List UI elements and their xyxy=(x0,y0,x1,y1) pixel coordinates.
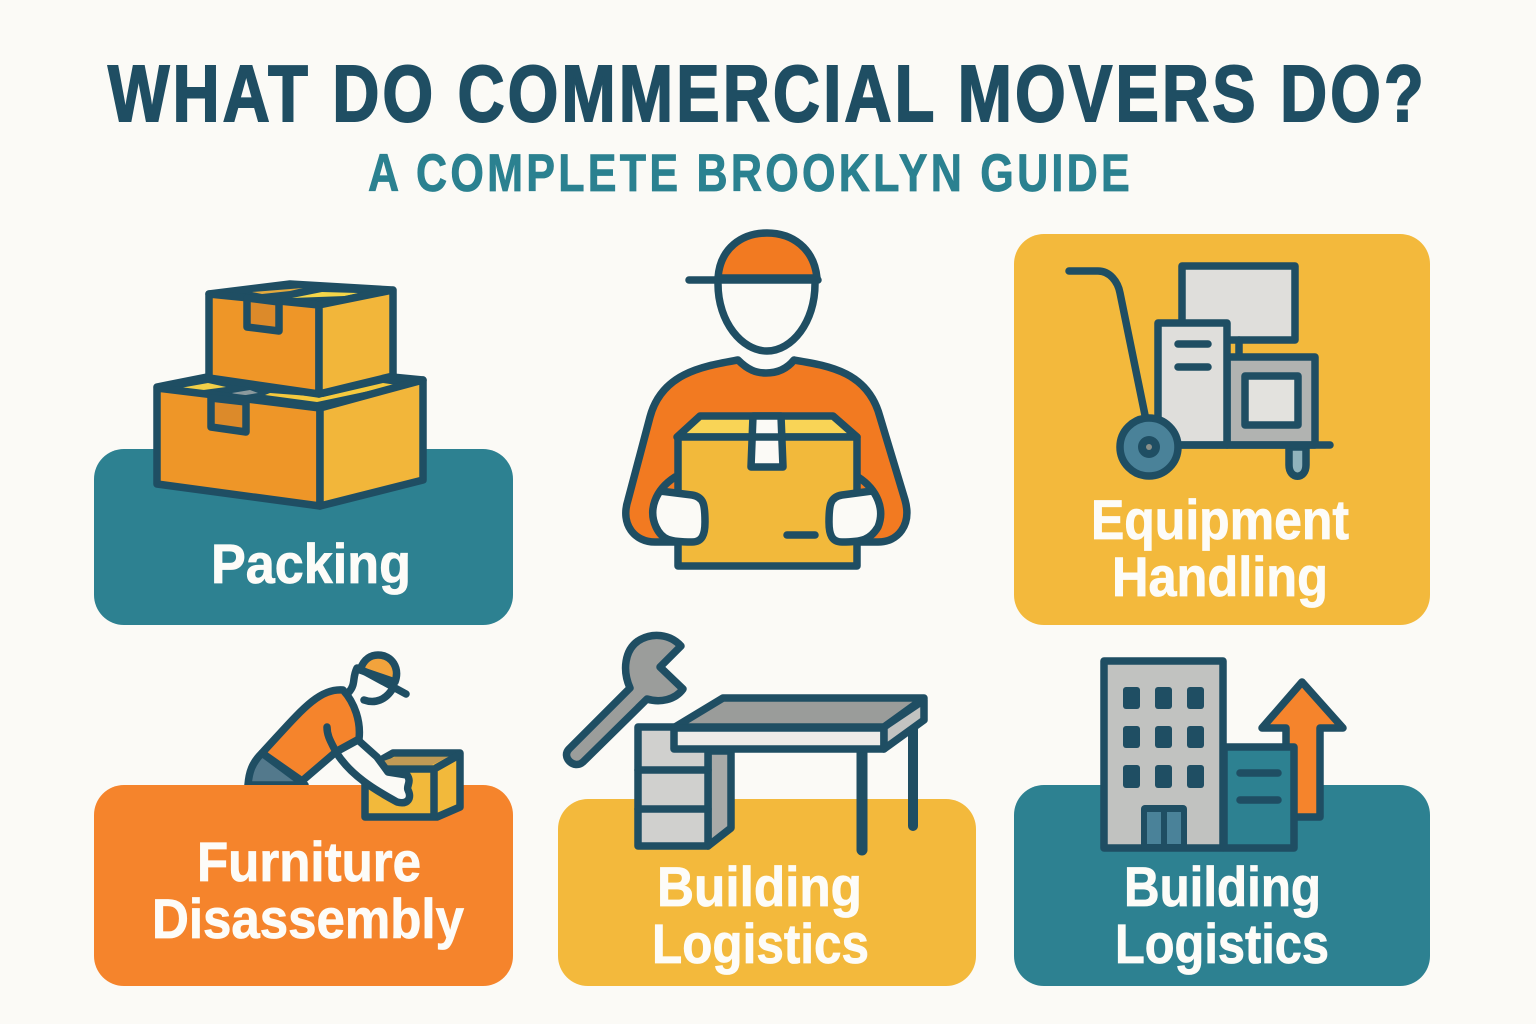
label: furniture disassembly: Disassembly xyxy=(152,887,464,950)
left hand xyxy=(653,477,705,542)
mover head and cap xyxy=(689,233,818,351)
icon: desk xyxy=(638,698,924,850)
furniture card xyxy=(94,785,513,986)
icon: wrench xyxy=(567,635,683,765)
label: furniture disassembly: Furniture xyxy=(197,830,421,893)
label: building logistics xyxy=(652,855,869,975)
label: furniture disassembly xyxy=(152,830,464,950)
label: building logistics: Building xyxy=(657,855,862,918)
equipment card xyxy=(1014,234,1430,625)
label: building logistics: Logistics xyxy=(1115,912,1329,975)
label: equipment handling xyxy=(1091,488,1349,608)
label: equipment handling: Equipment xyxy=(1091,488,1349,551)
packing card xyxy=(94,449,513,625)
yellow card xyxy=(558,799,976,986)
teal card xyxy=(1014,785,1430,986)
label: packing: Packing xyxy=(211,532,411,595)
carried box xyxy=(677,416,857,566)
icon: equipment on hand truck xyxy=(1069,266,1330,476)
icon: upward arrow xyxy=(1262,682,1343,817)
worker lower body xyxy=(248,753,305,785)
icon: mover holding box xyxy=(626,233,907,566)
icon: worker lifting box xyxy=(262,655,460,817)
icon: office building xyxy=(1104,661,1294,849)
subtitle: A COMPLETE BROOKLYN GUIDE xyxy=(368,144,1133,203)
right hand xyxy=(829,477,881,542)
mover torso xyxy=(626,360,907,542)
panel: building logistics teal xyxy=(1014,661,1430,986)
panel: building logistics yellow xyxy=(558,635,976,986)
panel: packing xyxy=(94,284,513,625)
panel: equipment handling xyxy=(1014,234,1430,625)
label: equipment handling: Handling xyxy=(1112,545,1328,608)
label: building logistics: Logistics xyxy=(652,912,869,975)
label: building logistics: Building xyxy=(1124,855,1321,918)
icon: stacked boxes xyxy=(157,284,423,506)
label: building logistics xyxy=(1115,855,1329,975)
panel: furniture disassembly xyxy=(94,655,513,986)
